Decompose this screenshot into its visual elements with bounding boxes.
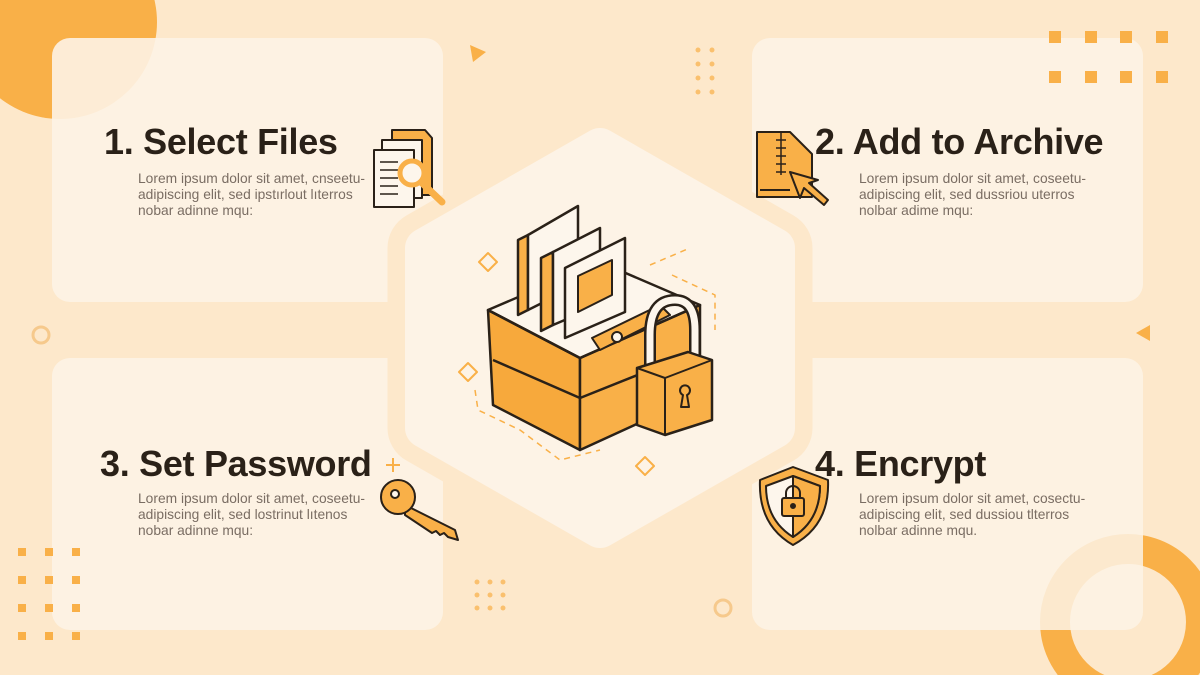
text: step 4 body: nolbar adinne mqu. [859, 523, 977, 538]
heading: 3. Set Password: 3. Set Password [100, 443, 372, 484]
zipper tag [592, 305, 670, 350]
icon: files with magnifier [374, 130, 442, 207]
panel: select files card [52, 38, 443, 302]
decoration: bottom-right ring [1055, 549, 1200, 675]
text: step 1 body: adipiscing elit, sed ipstırlout lıterros [138, 187, 353, 202]
heading: 4. Encrypt: 4. Encrypt [815, 443, 986, 484]
small shapes [470, 45, 486, 62]
icon: shield with lock [760, 467, 828, 545]
panel: encrypt card [752, 358, 1143, 630]
heading: 2. Add to Archive: 2. Add to Archive [815, 121, 1103, 162]
text: step 1 body: nobar adinne mqu: [138, 203, 253, 218]
decoration: top-left circle [0, 0, 157, 119]
panel: add to archive card [752, 38, 1143, 302]
text: step 3 body: adipiscing elit, sed lostrinut lıtenos [138, 507, 347, 522]
text: step 3 body [138, 491, 365, 538]
text: step 2 body: Lorem ipsum dolor sit amet, coseetu- [859, 171, 1086, 186]
heading: 1. Select Files: 1. Select Files [104, 121, 338, 162]
files [518, 235, 528, 315]
hexagon ring [425, 148, 775, 528]
text: step 2 body [859, 171, 1086, 218]
text: step 3 body: nobar adinne mqu: [138, 523, 253, 538]
text: step 4 body: adipiscing elit, sed dussiou tlterros [859, 507, 1069, 522]
panel: set password card [52, 358, 443, 630]
text: step 1 body [138, 171, 365, 218]
text: step 2 body: nolbar adime mqu: [859, 203, 973, 218]
text: step 2 body: adipiscing elit, sed dussriou uterros [859, 187, 1074, 202]
text: step 3 body: Lorem ipsum dolor sit amet, coseetu- [138, 491, 365, 506]
icon: key [381, 458, 458, 540]
text: step 4 body [859, 491, 1085, 538]
center hexagon [425, 148, 775, 528]
box [488, 310, 580, 450]
central illustration: archive box with lock [459, 206, 715, 475]
icon: zip archive with cursor [757, 132, 828, 205]
padlock [650, 300, 695, 370]
text: step 4 body: Lorem ipsum dolor sit amet, cosectu- [859, 491, 1085, 506]
text: step 1 body: Lorem ipsum dolor sit amet, cnseetu- [138, 171, 365, 186]
